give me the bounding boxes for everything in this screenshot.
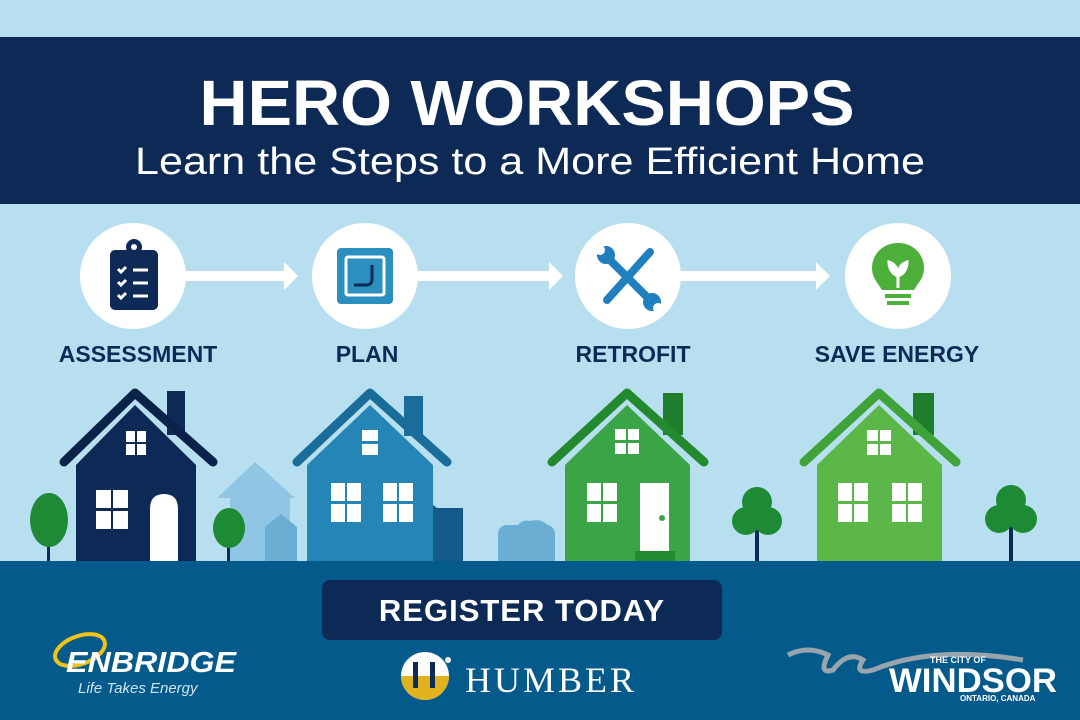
register button: REGISTER TODAY [379, 593, 665, 628]
background houses [217, 462, 555, 561]
logo: windsor: WINDSOR [889, 662, 1057, 700]
trees [30, 485, 1037, 561]
house 1 (navy) [64, 391, 213, 561]
logo: windsor: THE CITY OF [930, 655, 986, 665]
logo: enbridge: Life Takes Energy [78, 680, 199, 697]
arrow 3 [681, 262, 830, 290]
register button [322, 580, 722, 640]
logo: humber: HUMBER [465, 660, 637, 700]
subtitle: Learn the Steps to a More Efficient Home [135, 141, 925, 183]
icon: plan [312, 223, 418, 329]
step labels [59, 341, 979, 367]
icon: bulb [845, 223, 951, 329]
arrow 2 [418, 262, 563, 290]
icon: clipboard [80, 223, 186, 329]
step labels: SAVE ENERGY [815, 341, 979, 367]
logo: enbridge: ENBRIDGE [66, 647, 238, 679]
logo: windsor: ONTARIO, CANADA [960, 694, 1036, 703]
house 2 (blue) [297, 393, 463, 561]
arrow 1 [186, 262, 298, 290]
title: HERO WORKSHOPS [200, 67, 854, 139]
step labels: ASSESSMENT [59, 341, 217, 367]
logo: windsor [788, 650, 1057, 703]
logo: humber [401, 652, 637, 700]
footer band [0, 561, 1080, 720]
title banner [0, 37, 1080, 204]
house 4 (light green) [804, 393, 956, 561]
house 3 (green) [552, 393, 704, 561]
step labels: PLAN [336, 341, 398, 367]
icon: tools [575, 223, 681, 329]
logo: enbridge [51, 628, 238, 697]
step labels: RETROFIT [576, 341, 690, 367]
